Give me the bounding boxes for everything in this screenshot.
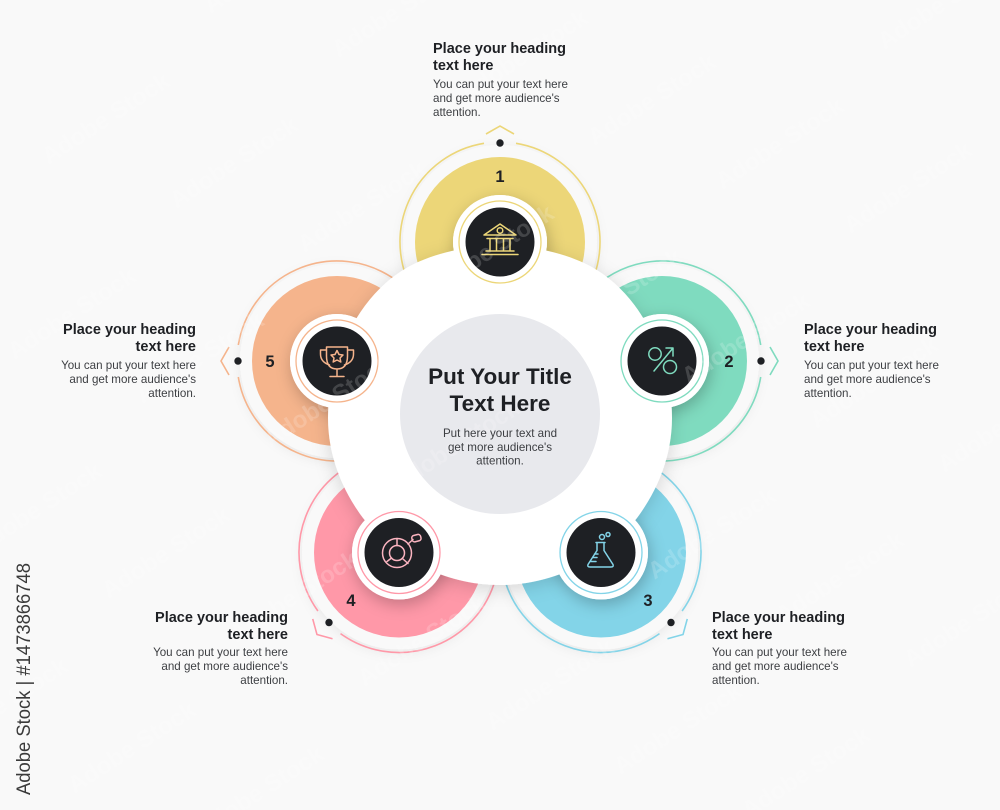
petal 2: green	[562, 261, 778, 461]
icon badge 1: bank	[453, 195, 547, 289]
text block 5: attention.	[148, 387, 196, 400]
center circle	[400, 314, 600, 514]
numbers: 4	[346, 592, 356, 610]
center body text: get more audience's	[448, 441, 552, 454]
text block 2: and get more audience's	[804, 373, 931, 386]
text block 2: Place your heading	[804, 322, 937, 338]
text block 5: Place your heading	[63, 322, 196, 338]
text block 3: You can put your text here	[712, 646, 847, 659]
stock watermark pattern: Adobe Stock	[583, 48, 721, 151]
stock watermark pattern: Adobe Stock	[165, 111, 303, 214]
vertical stock id: Adobe Stock | #1473866748	[14, 563, 35, 795]
stock watermark pattern: Adobe Stock	[37, 67, 175, 170]
text block 3: and get more audience's	[712, 660, 839, 673]
stock watermark pattern: Adobe Stock	[225, 545, 363, 648]
stock watermark pattern: Adobe Stock	[805, 331, 943, 434]
text block 5: text here	[136, 339, 196, 355]
stock watermark pattern: Adobe Stock	[97, 501, 235, 604]
stock watermark pattern: Adobe Stock	[3, 262, 141, 365]
stock watermark pattern: Adobe Stock	[549, 243, 687, 346]
petal 3: blue	[460, 411, 742, 693]
text block 2: You can put your text here	[804, 359, 939, 372]
text block 2: text here	[804, 339, 864, 355]
central white blob	[328, 246, 672, 585]
text block 4: and get more audience's	[161, 660, 288, 673]
numbers	[265, 168, 734, 610]
text block 3: attention.	[712, 674, 760, 687]
numbers: 2	[724, 353, 734, 371]
text block 1: and get more audience's	[433, 92, 560, 105]
text block 1: Place your heading	[433, 41, 566, 57]
stock watermark pattern: Adobe Stock	[353, 589, 491, 692]
text block 2	[804, 322, 939, 400]
stock watermark pattern: Adobe Stock	[293, 155, 431, 258]
center body text: Put here your text and	[443, 427, 557, 440]
text block 1: attention.	[433, 106, 481, 119]
text block 4	[153, 610, 288, 687]
stock watermark pattern: Adobe Stock	[63, 696, 201, 799]
center title: Put Your Title	[428, 364, 572, 389]
center body text: attention.	[476, 454, 524, 468]
text block 2: attention.	[804, 387, 852, 400]
center title panel	[428, 364, 572, 468]
icon badge 3: flask	[554, 506, 648, 600]
text block 5	[61, 322, 196, 400]
icon badge 5: trophy	[290, 314, 384, 408]
icon badge 2: percent arrow	[615, 314, 709, 408]
stock watermark pattern: Adobe Stock	[839, 136, 977, 239]
icon badge 4: ring chart	[352, 506, 446, 600]
stock watermark pattern: Adobe Stock	[481, 633, 619, 736]
numbers: 1	[495, 168, 505, 186]
petal 4: pink	[258, 411, 540, 693]
petal 1: yellow	[400, 126, 600, 342]
text block 5: and get more audience's	[69, 373, 196, 386]
stock watermark pattern: Adobe Stock	[711, 92, 849, 195]
stock watermark pattern: Adobe Stock	[515, 438, 653, 541]
stock watermark pattern: Adobe Stock	[421, 199, 559, 302]
text block 4: You can put your text here	[153, 646, 288, 659]
stock watermark pattern: Adobe Stock	[643, 482, 781, 585]
stock watermark pattern: Adobe Stock	[609, 677, 747, 780]
text block 4: attention.	[240, 674, 288, 687]
text block 3: Place your heading	[712, 610, 845, 626]
numbers: 3	[643, 592, 653, 610]
numbers: 5	[265, 353, 275, 371]
stock watermark pattern: Adobe Stock	[131, 306, 269, 409]
text block 1	[433, 41, 568, 119]
stock watermark pattern: Adobe Stock	[387, 394, 525, 497]
text block 1: You can put your text here	[433, 78, 568, 91]
stock watermark pattern: Adobe Stock	[259, 350, 397, 453]
text block 3: text here	[712, 627, 772, 643]
text block 4: text here	[228, 627, 288, 643]
text block 4: Place your heading	[155, 610, 288, 626]
stock watermark pattern: Adobe Stock	[677, 287, 815, 390]
text block 1: text here	[433, 58, 493, 74]
stock watermark pattern: Adobe Stock	[455, 4, 593, 107]
stock watermark pattern: Adobe Stock	[771, 526, 909, 629]
text block 5: You can put your text here	[61, 359, 196, 372]
text block 3	[712, 610, 847, 687]
center title line 2: Text Here	[450, 391, 550, 416]
petal 5: orange	[221, 261, 437, 461]
